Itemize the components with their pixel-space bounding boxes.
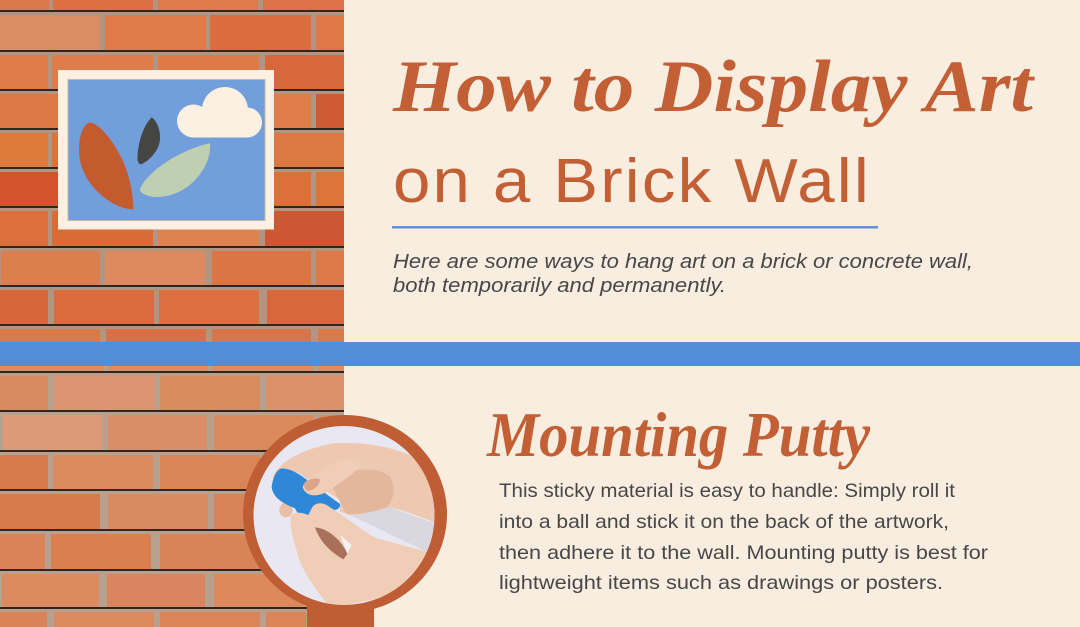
brick wall: top [0,0,344,342]
section heading: mounting putty: Mounting Putty [486,399,871,470]
badge ring [243,415,447,613]
icon: dark leaf [138,117,160,164]
title underline [392,226,878,228]
title: script line: How to Display Art [392,46,1036,128]
section body text: into a ball and stick it on the back of the artwork, [499,511,949,533]
framed artwork [58,70,274,230]
brick wall: bottom [0,366,344,627]
intro text: Here are some ways to hang art on a brick or concrete wall, [393,250,973,273]
badge stem [307,600,374,627]
intro text [393,250,973,297]
icon: green leaf [140,143,210,197]
title: sans line: on a Brick Wall [393,147,871,216]
section body text [499,480,989,594]
icon: orange leaf [79,122,134,210]
icon: cloud [177,87,262,138]
section body text: This sticky material is easy to handle: Simply roll it [499,480,956,502]
photo badge: mounting putty [240,410,450,627]
section body text: then adhere it to the wall. Mounting putty is best for [499,542,989,564]
photo: hands with putty [254,426,434,605]
intro text: both temporarily and permanently. [393,274,726,297]
blue band [0,342,1080,366]
section body text: lightweight items such as drawings or posters. [499,572,943,594]
